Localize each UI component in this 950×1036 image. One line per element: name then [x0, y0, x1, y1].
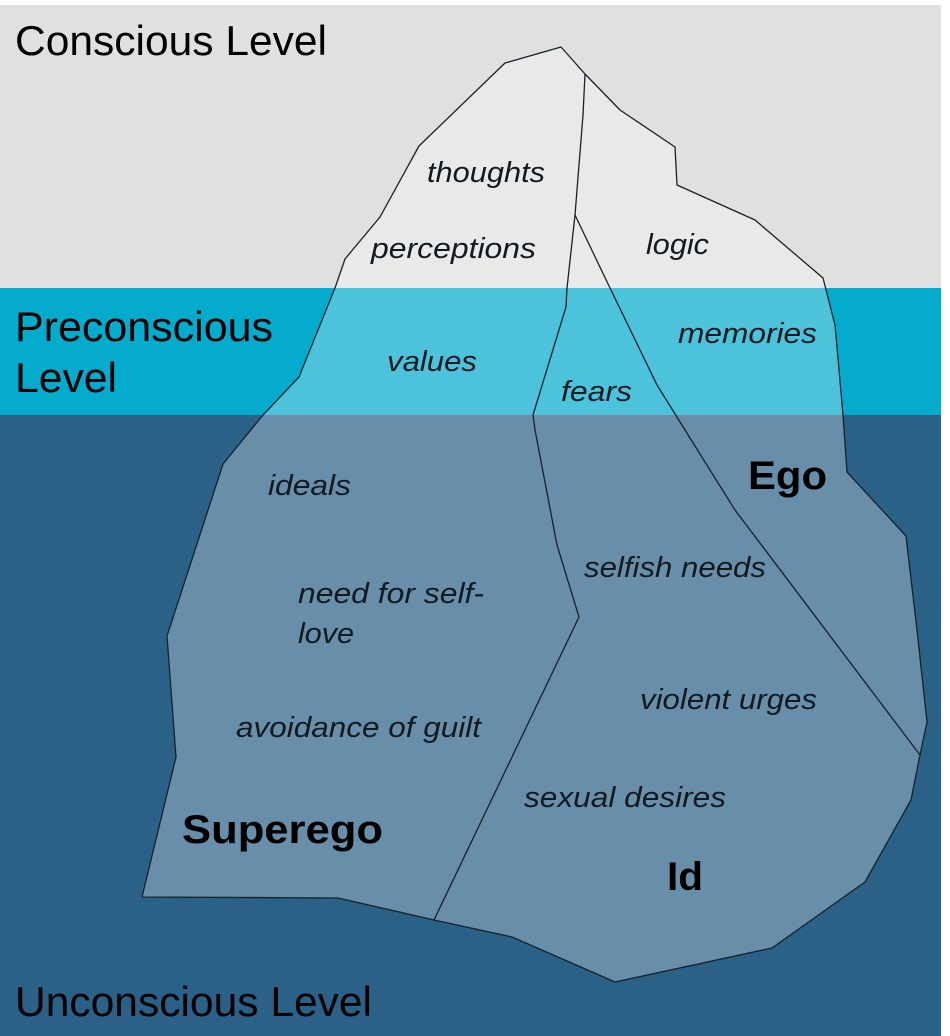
heading: preconscious level — [15, 303, 273, 401]
label: Superego: Superego — [182, 808, 383, 852]
label: memories: memories — [678, 318, 817, 350]
label: fears: fears — [561, 376, 632, 408]
divider: ego and id boundary — [575, 215, 920, 755]
label: need for self-love — [298, 578, 484, 650]
band: conscious level — [0, 5, 941, 288]
label: ideals: ideals — [268, 470, 351, 502]
band: unconscious level — [0, 415, 941, 1036]
label: violent urges: violent urges — [640, 684, 817, 716]
label: need for self-love: love — [298, 618, 354, 650]
label: thoughts: thoughts — [427, 157, 545, 189]
heading: preconscious level: Level — [15, 354, 117, 401]
label: selfish needs: selfish needs — [584, 552, 766, 584]
label: values: values — [387, 346, 477, 378]
label: perceptions: perceptions — [370, 233, 536, 265]
heading: conscious level: Conscious Level — [15, 17, 327, 64]
heading: preconscious level: Preconscious — [15, 303, 273, 350]
iceberg body — [142, 47, 927, 982]
label: sexual desires: sexual desires — [524, 782, 726, 814]
band: preconscious level — [0, 288, 941, 415]
divider: superego boundary — [434, 74, 585, 920]
label: Ego: Ego — [748, 454, 827, 498]
heading: unconscious level: Unconscious Level — [15, 978, 372, 1025]
label: Id: Id — [667, 855, 703, 899]
label: need for self-love: need for self- — [298, 578, 484, 610]
label: avoidance of guilt: avoidance of guilt — [236, 712, 483, 744]
label: logic: logic — [646, 229, 710, 261]
